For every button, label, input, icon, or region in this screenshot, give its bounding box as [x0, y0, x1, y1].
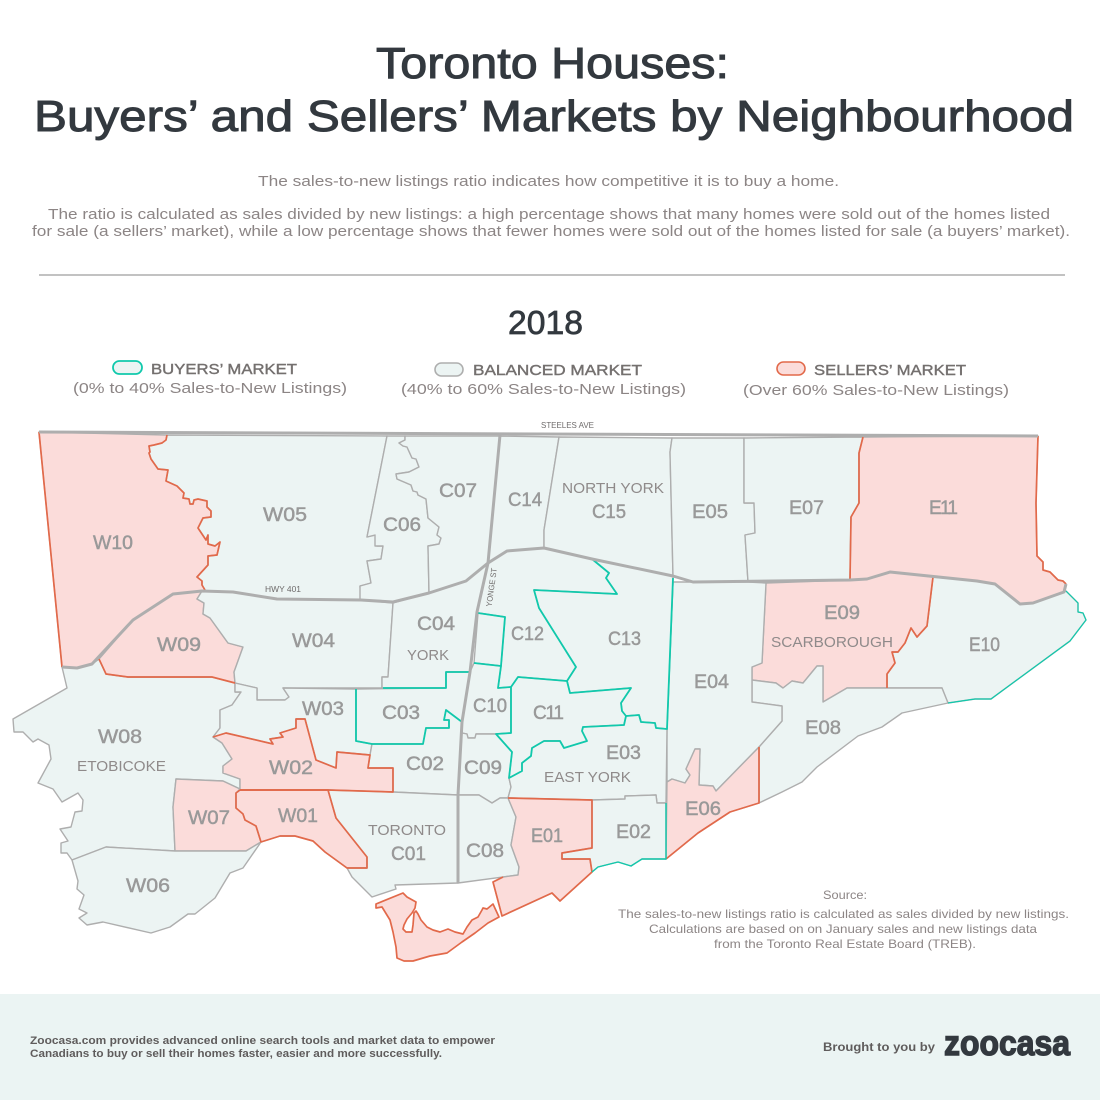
buyers' market boundaries — [356, 559, 1086, 872]
intro text: for sale (a sellers’ market), while a low percentage shows that fewer homes were sold out of the homes listed for sale (a buyers’ market). — [32, 223, 1070, 240]
district C10: C10 — [473, 696, 507, 717]
district C01 — [328, 790, 458, 897]
district C06 — [360, 436, 441, 602]
title — [34, 39, 1074, 141]
district W10 — [39, 432, 220, 668]
Toronto Islands — [376, 893, 499, 961]
legend: balanced market: (40% to 60% Sales-to-New Listings) — [401, 381, 686, 398]
legend: buyers' market — [73, 361, 347, 397]
district C12: C12 — [511, 624, 544, 645]
district E09: SCARBOROUGH — [771, 634, 893, 651]
district E04: E04 — [694, 672, 729, 693]
district E11: E11 — [929, 498, 958, 519]
legend: sellers' market — [743, 362, 1009, 399]
title: Buyers’ and Sellers’ Markets by Neighbourhood — [34, 92, 1074, 141]
district W01 — [236, 790, 367, 868]
district C15 — [544, 437, 673, 576]
legend: buyers' market: BUYERS’ MARKET — [151, 361, 297, 378]
title: Toronto Houses: — [376, 39, 729, 88]
district E08 — [752, 666, 948, 803]
legend: sellers' market: SELLERS’ MARKET — [814, 362, 966, 379]
road label: Steeles Ave: STEELES AVE — [541, 421, 594, 430]
footer description: Zoocasa.com provides advanced online search tools and market data to empower — [30, 1035, 496, 1047]
district C03 — [356, 672, 470, 744]
district E10: E10 — [969, 635, 1000, 656]
district W04 — [197, 591, 393, 700]
zoocasa logo wordmark: zoocasa — [944, 1024, 1070, 1063]
intro text: The ratio is calculated as sales divided by new listings: a high percentage shows that many homes were sold out of the homes listed — [48, 206, 1050, 223]
district C01: TORONTO — [368, 822, 446, 839]
source note — [618, 888, 1069, 951]
district C13: C13 — [608, 629, 641, 650]
district E07: E07 — [789, 498, 824, 519]
legend: balanced market: BALANCED MARKET — [473, 362, 642, 379]
source note: Calculations are based on on January sales and new listings data — [649, 922, 1037, 936]
road label: Yonge St: YONGE ST — [485, 567, 499, 607]
district C03: C03 — [382, 703, 420, 724]
district W10: W10 — [93, 533, 133, 554]
district C06: C06 — [383, 515, 421, 536]
district W02: W02 — [269, 758, 313, 779]
district C09 — [458, 733, 512, 803]
district C14: C14 — [508, 490, 542, 511]
district W08 — [13, 659, 241, 860]
district E01 — [493, 798, 592, 916]
district W07 — [173, 779, 261, 851]
district W01: W01 — [278, 806, 318, 827]
district E02: E02 — [616, 822, 651, 843]
district W08: W08 — [98, 727, 142, 748]
district C04: C04 — [417, 614, 455, 635]
district C11 — [496, 677, 631, 778]
intro text — [32, 173, 1070, 240]
sellers' market boundaries — [39, 432, 1066, 916]
footer band — [0, 994, 1100, 1100]
district C01: C01 — [391, 844, 426, 865]
district E06: E06 — [685, 799, 721, 820]
district C09: C09 — [464, 758, 502, 779]
legend: buyers' market: (0% to 40% Sales-to-New Listings) — [73, 380, 347, 397]
district E04 — [667, 582, 782, 791]
district E07 — [744, 437, 863, 582]
source note: from the Toronto Real Estate Board (TREB). — [714, 937, 976, 951]
district W03 — [213, 683, 372, 768]
district E03: EAST YORK — [544, 769, 631, 786]
district C08 — [458, 795, 519, 883]
district C07 — [396, 436, 500, 593]
district C13 — [534, 559, 673, 729]
district E02 — [562, 795, 666, 872]
small unlabelled district north of C10 — [474, 613, 505, 666]
district C04 — [382, 563, 488, 688]
district W03: W03 — [302, 699, 344, 720]
district E06 — [666, 747, 759, 859]
district C10 — [462, 663, 511, 738]
district E09: E09 — [824, 603, 860, 624]
district C15: C15 — [592, 502, 626, 523]
footer description: Canadians to buy or sell their homes faster, easier and more successfully. — [30, 1048, 442, 1060]
brought to you by: Brought to you by — [823, 1040, 935, 1054]
district W09 — [99, 591, 243, 683]
legend: balanced market — [401, 362, 686, 398]
district E03 — [508, 715, 667, 803]
district C11: C11 — [533, 703, 564, 724]
district C04: YORK — [407, 647, 449, 664]
district C07: C07 — [439, 481, 477, 502]
district C12 — [477, 548, 617, 688]
district W04: W04 — [292, 631, 335, 652]
district E08: E08 — [805, 718, 841, 739]
district E03: E03 — [606, 743, 641, 764]
district W06: W06 — [126, 876, 170, 897]
district C08: C08 — [466, 841, 504, 862]
district W06 — [72, 842, 261, 933]
district E01: E01 — [531, 826, 563, 847]
district C02 — [368, 710, 462, 795]
district E05: E05 — [692, 502, 728, 523]
source note: The sales-to-new listings ratio is calculated as sales divided by new listings. — [618, 907, 1069, 921]
major roads: Steeles Ave, Highway 401, Yonge St — [39, 432, 1066, 883]
district E10 — [887, 577, 1086, 703]
district E05 — [670, 438, 755, 582]
legend: sellers' market: (Over 60% Sales-to-New Listings) — [743, 382, 1009, 399]
district C14 — [488, 436, 559, 563]
district W09: W09 — [157, 635, 201, 656]
district E09 — [752, 572, 933, 702]
road label: Hwy 401: HWY 401 — [265, 585, 302, 594]
district W08: ETOBICOKE — [77, 758, 166, 775]
district W07: W07 — [188, 808, 230, 829]
district C02: C02 — [406, 754, 444, 775]
intro text: The sales-to-new listings ratio indicates how competitive it is to buy a home. — [258, 173, 839, 190]
map of Toronto neighbourhoods — [13, 421, 1086, 961]
district C15: NORTH YORK — [562, 480, 664, 497]
district E11 — [850, 436, 1066, 604]
district W05: W05 — [263, 505, 307, 526]
district W05 — [149, 435, 387, 600]
year heading: 2018 — [508, 304, 583, 341]
district W02 — [213, 719, 393, 792]
footer description — [30, 1035, 496, 1060]
source note: Source: — [823, 888, 867, 902]
